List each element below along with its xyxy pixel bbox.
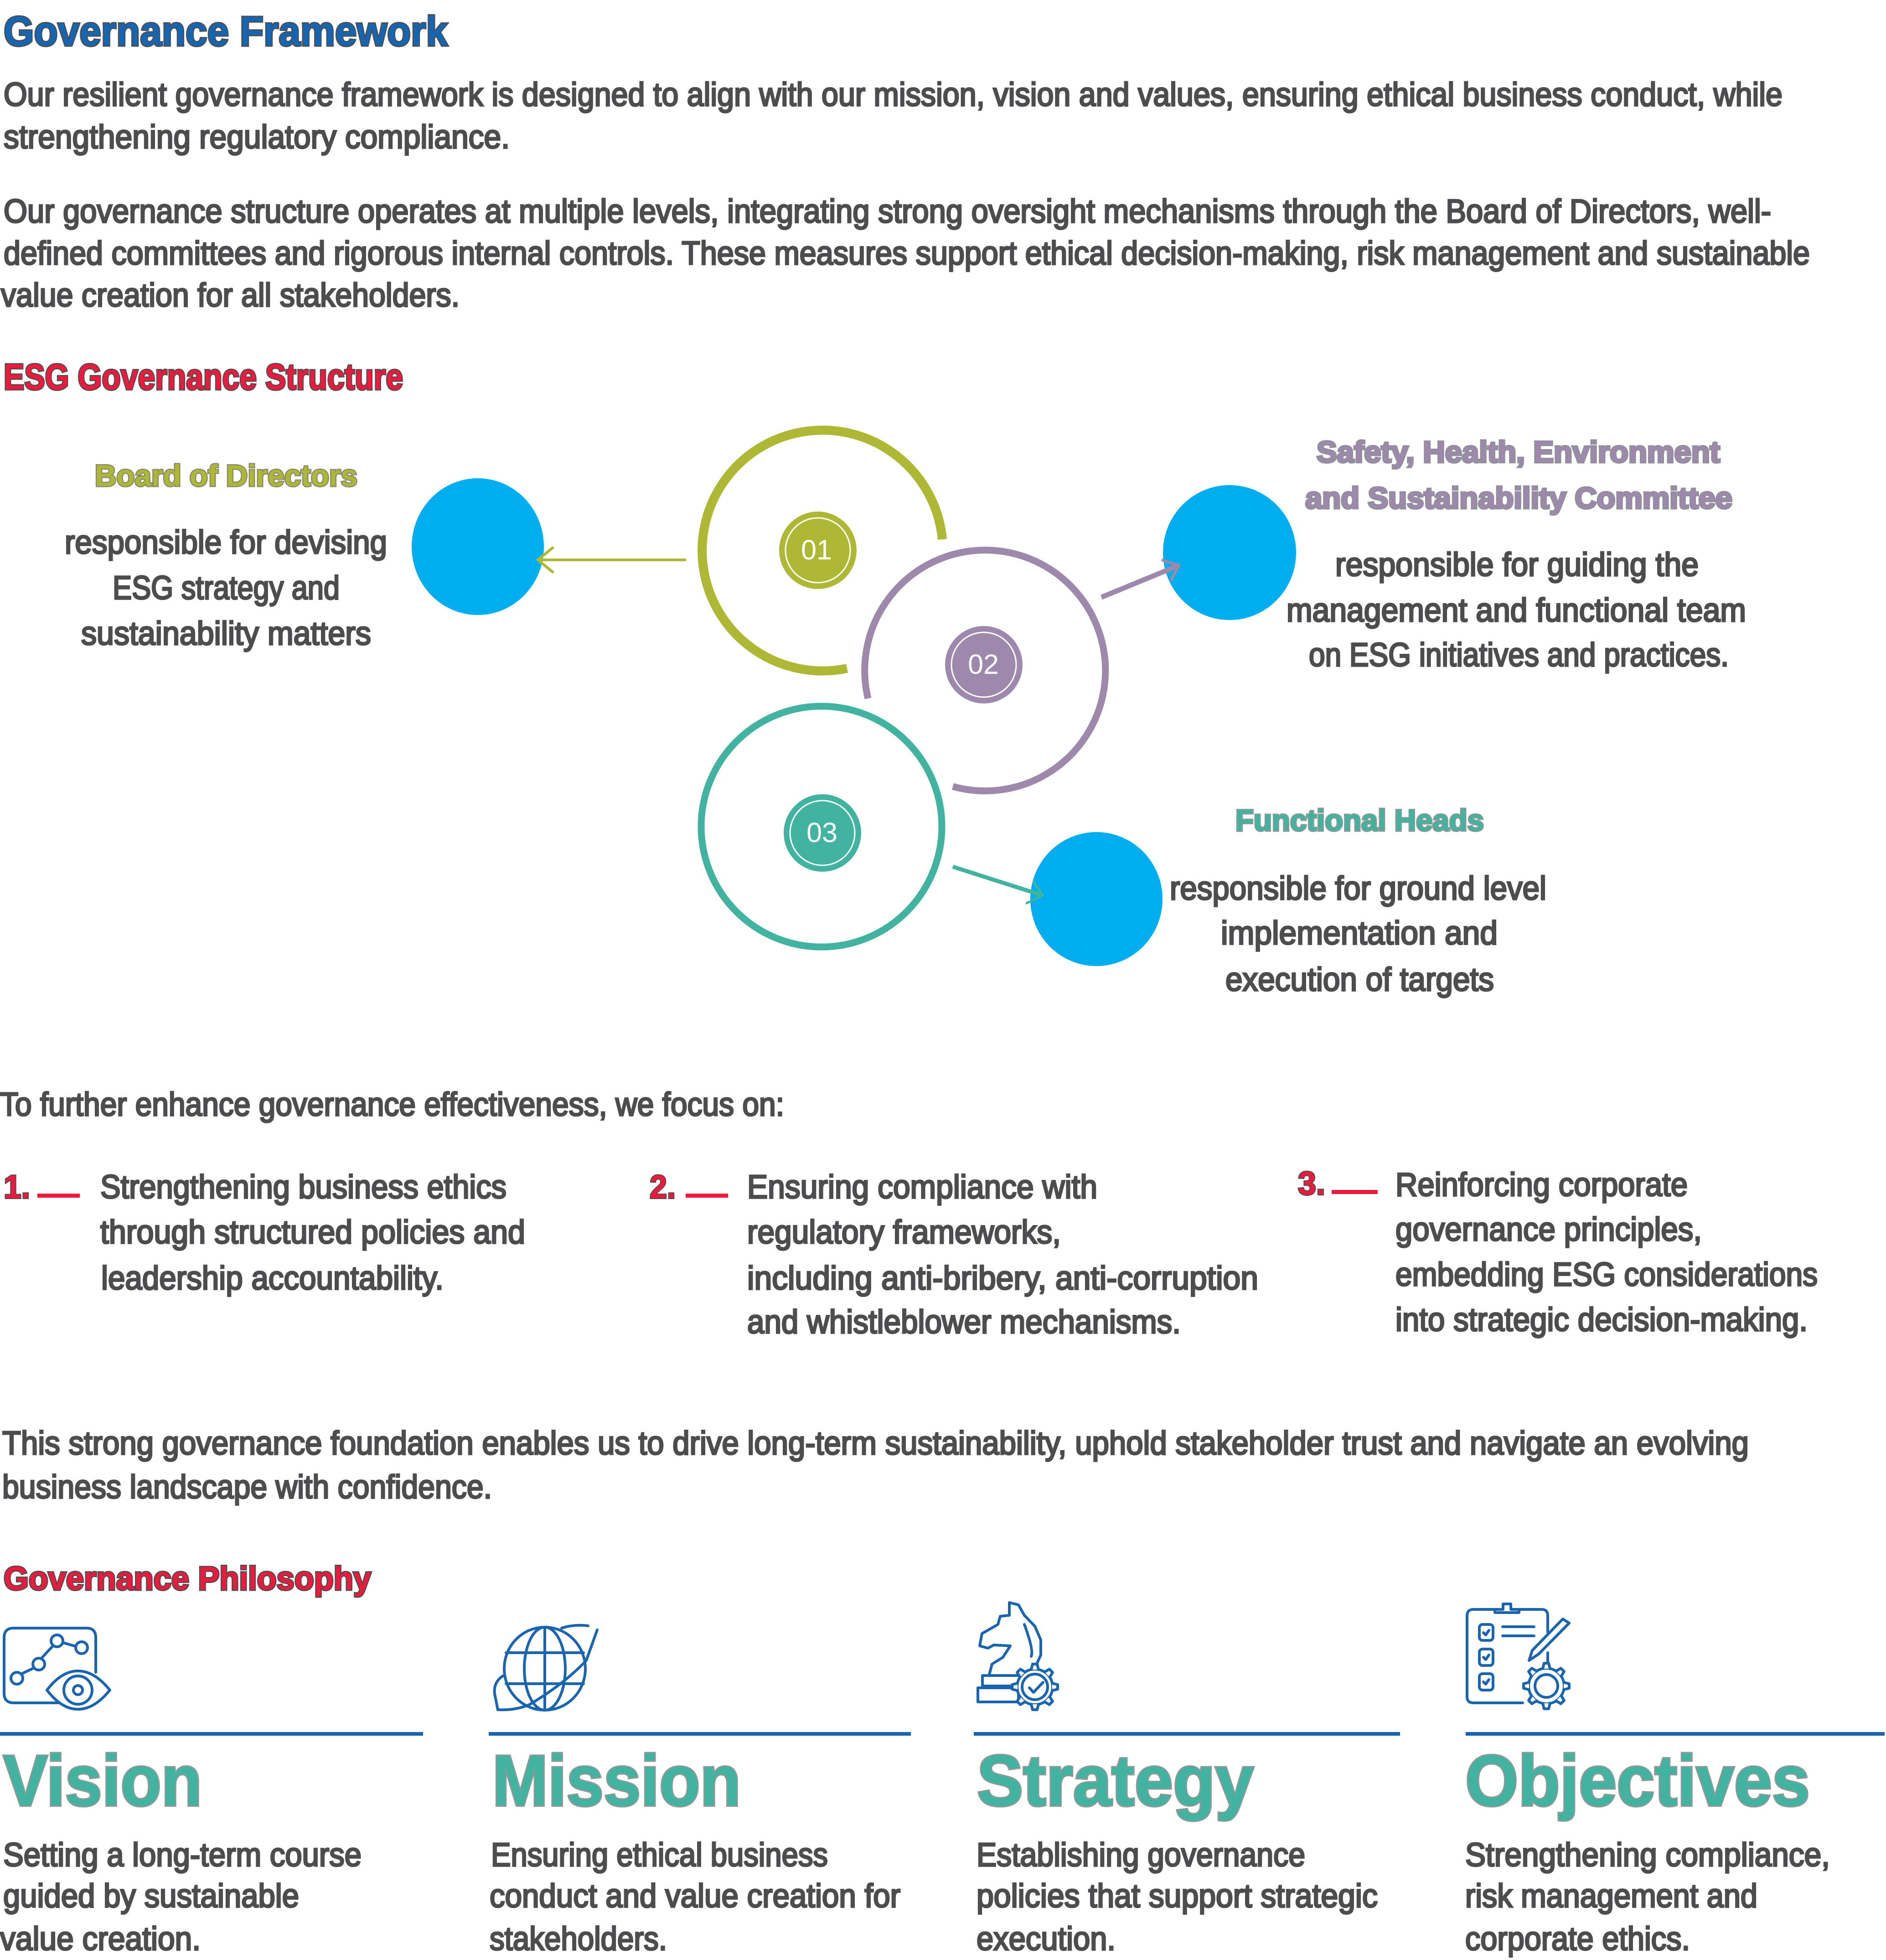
heading: Governance Philosophy: Governance Philosophy: [4, 1561, 371, 1597]
focus item 1: leadership accountability.: [101, 1260, 444, 1297]
panel: mission: Mission: [492, 1741, 741, 1821]
label: Functional Heads: [1170, 803, 1546, 998]
closing paragraph: [2, 1425, 1749, 1505]
ring 01: [702, 430, 942, 671]
label: Board of Directors: [65, 459, 387, 652]
panel: strategy: [977, 1741, 1378, 1957]
icon placeholder: blue circle board: [412, 478, 544, 615]
objectives description: risk management and: [1465, 1878, 1757, 1914]
panel: vision: Vision: [3, 1741, 202, 1821]
badge 01: 01: [801, 534, 832, 565]
badge 02: [945, 626, 1023, 703]
arrow: ring 03 to functional heads: [953, 867, 1043, 904]
intro paragraph 1: [4, 77, 1783, 155]
objectives description: Strengthening compliance,: [1465, 1837, 1830, 1873]
description: functional heads: [1170, 870, 1546, 998]
focus item 3: 3.: [1298, 1165, 1325, 1202]
description: committee: on ESG initiatives and practices.: [1309, 637, 1729, 673]
panel: objectives: Objectives: [1465, 1741, 1810, 1821]
panel: strategy: Strategy: [977, 1741, 1254, 1821]
panel: objectives: [1465, 1741, 1830, 1957]
focus item 2: [650, 1169, 1258, 1340]
mission description: conduct and value creation for: [490, 1878, 900, 1914]
focus item 3: embedding ESG considerations: [1395, 1257, 1818, 1293]
badge 03: [784, 794, 861, 872]
objectives description: [1465, 1837, 1830, 1957]
description: board: sustainability matters: [81, 615, 371, 652]
diagram: governance rings: [701, 430, 1106, 947]
ring 02: [865, 550, 1106, 791]
focus item 1: 1.: [4, 1169, 30, 1205]
description: committee: responsible for guiding the: [1335, 547, 1699, 583]
description: board: [65, 524, 387, 652]
label: Functional Heads: Functional Heads: [1235, 803, 1484, 837]
intro paragraph 2: [1, 193, 1810, 314]
mission description: [490, 1837, 900, 1957]
description: functional heads: responsible for ground level: [1170, 870, 1546, 907]
strategy description: [977, 1837, 1378, 1957]
label: Board of Directors: Board of Directors: [95, 459, 357, 492]
focus intro line: To further enhance governance effectiveness, we focus on:: [0, 1086, 784, 1123]
focus item 1: [4, 1169, 525, 1297]
badge 02: 02: [968, 649, 999, 680]
description: board: ESG strategy and: [113, 570, 340, 606]
strategy description: policies that support strategic: [977, 1878, 1378, 1914]
icon placeholder: blue circle functional heads: [1030, 832, 1163, 966]
closing paragraph: This strong governance foundation enables us to drive long-term sustainability, uphold stakeholder trust and navigate an evolving: [2, 1425, 1749, 1462]
intro paragraph 2: Our governance structure operates at multiple levels, integrating strong oversight mechanisms through the Board of Directors, well-: [4, 193, 1771, 230]
focus item 3: into strategic decision-making.: [1395, 1302, 1808, 1338]
focus item 1: through structured policies and: [100, 1214, 525, 1251]
focus item 1: Strengthening business ethics: [100, 1169, 506, 1205]
arrow: ring 02 to committee: [1101, 560, 1179, 597]
vision description: value creation.: [0, 1921, 201, 1957]
closing paragraph: business landscape with confidence.: [2, 1469, 492, 1505]
label: Safety, Health, Environment and Sustainability Committee: Safety, Health, Environment: [1317, 435, 1720, 469]
icon: vision: [4, 1628, 110, 1709]
description: functional heads: execution of targets: [1225, 962, 1494, 998]
objectives description: corporate ethics.: [1465, 1921, 1690, 1957]
focus item 2: including anti-bribery, anti-corruption: [747, 1260, 1258, 1297]
focus item 2: regulatory frameworks,: [747, 1214, 1061, 1251]
arrow: ring 01 to board: [538, 547, 686, 573]
focus item 3: Reinforcing corporate: [1395, 1167, 1688, 1203]
description: committee: [1287, 547, 1746, 673]
intro paragraph 2: value creation for all stakeholders.: [1, 277, 460, 314]
icon: objectives: [1467, 1604, 1569, 1709]
focus item 2: Ensuring compliance with: [747, 1169, 1097, 1205]
focus item 3: [1298, 1165, 1818, 1338]
panel: vision: [0, 1741, 362, 1957]
description: committee: management and functional team: [1287, 592, 1746, 629]
label: Safety, Health, Environment and Sustainability Committee: and Sustainability Committee: [1305, 481, 1732, 515]
focus item 2: 2.: [650, 1169, 676, 1205]
icon placeholder: blue circle committee: [1163, 485, 1296, 620]
icon: strategy: [978, 1603, 1058, 1710]
badge 01: [779, 512, 857, 589]
panel: mission: [490, 1741, 900, 1957]
vision description: Setting a long-term course: [3, 1837, 362, 1873]
strategy description: execution.: [977, 1921, 1116, 1957]
focus item 2: and whistleblower mechanisms.: [747, 1304, 1181, 1340]
badge 03: 03: [806, 817, 837, 848]
intro paragraph 1: Our resilient governance framework is designed to align with our mission, vision and values, ensuring ethical business conduct, while: [4, 77, 1783, 113]
strategy description: Establishing governance: [977, 1837, 1305, 1873]
title: Governance Framework: [4, 8, 448, 55]
description: board: responsible for devising: [65, 524, 387, 561]
column rules: [0, 1732, 1885, 1736]
icon: mission: [495, 1625, 597, 1710]
ring 03: [701, 706, 942, 947]
label: Safety, Health, Environment and Sustainability Committee: [1287, 435, 1746, 673]
vision description: guided by sustainable: [3, 1878, 299, 1914]
description: functional heads: implementation and: [1221, 915, 1498, 952]
focus item 3: governance principles,: [1395, 1211, 1702, 1248]
mission description: Ensuring ethical business: [491, 1837, 828, 1873]
heading: ESG Governance Structure: ESG Governance Structure: [4, 357, 403, 397]
mission description: stakeholders.: [490, 1921, 667, 1957]
intro paragraph 1: strengthening regulatory compliance.: [4, 119, 510, 155]
vision description: [0, 1837, 362, 1957]
